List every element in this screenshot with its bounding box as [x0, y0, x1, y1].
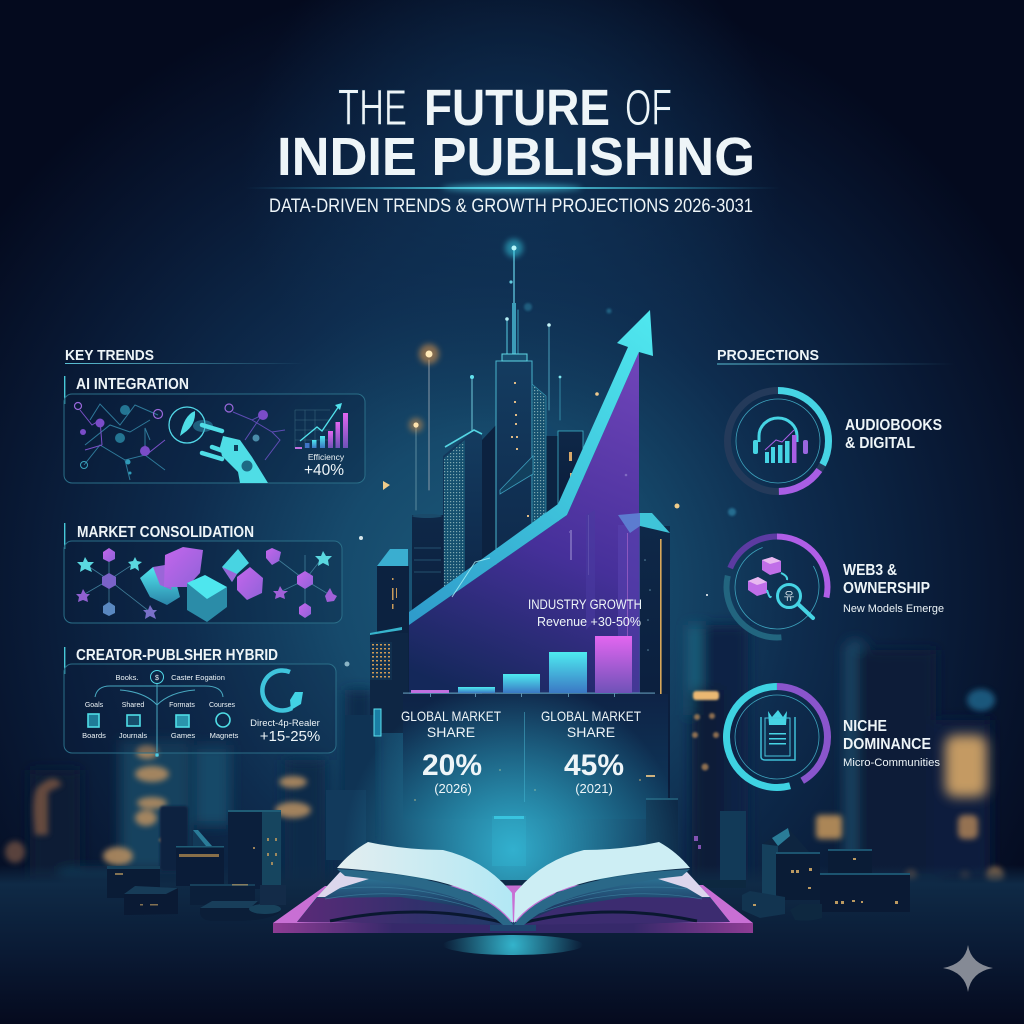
bar chart: industry growth [403, 597, 655, 697]
heading: AI INTEGRATION [76, 376, 189, 393]
panel: market consolidation [64, 523, 342, 623]
quill circle [169, 407, 213, 443]
efficiency label: Efficiency [308, 452, 345, 462]
panel: creator-publisher hybrid: Caster Eogation [171, 673, 225, 682]
right tower small [558, 431, 583, 521]
panel: creator-publisher hybrid: Courses [209, 702, 236, 709]
panel: creator-publisher hybrid: Goals [85, 702, 104, 709]
stat: market share 2026: GLOBAL MARKET [401, 708, 501, 724]
stat: market share 2021: 45% [564, 749, 624, 782]
label: AUDIOBOOKS [845, 417, 942, 434]
stat: market share 2021: (2021) [575, 781, 613, 796]
large cubes [140, 547, 263, 622]
left top page [337, 842, 513, 925]
direct to reader label: Direct-4p-Realer [250, 718, 320, 729]
growth arrow [409, 310, 653, 625]
panel: creator-publisher hybrid: Books. [116, 673, 138, 682]
stat: market share 2026: (2026) [434, 781, 472, 796]
projection: audiobooks [708, 371, 942, 511]
panel: creator-publisher hybrid: Journals [119, 731, 147, 740]
stat: market share 2026: 20% [422, 749, 482, 782]
small foreground buildings left [107, 806, 286, 921]
street lamps and spires [416, 250, 560, 510]
title line 1: THE [338, 79, 407, 136]
panel: creator-publisher hybrid [64, 647, 336, 756]
title: OF [625, 79, 672, 136]
chart label: INDUSTRY GROWTH [528, 597, 642, 612]
purple area under growth arrow [409, 352, 639, 693]
hybrid icons [88, 713, 230, 727]
open book [273, 842, 753, 955]
ring chart [711, 521, 843, 653]
bokeh lights [5, 504, 1004, 885]
label: WEB3 & [843, 562, 897, 579]
ring chart [708, 371, 848, 511]
bar chart: industry growth: Revenue +30-50% [537, 615, 641, 629]
mini bar chart [295, 403, 348, 449]
back tower block [482, 425, 496, 700]
connector lines [83, 553, 330, 612]
icon: sparkle watermark [943, 945, 993, 992]
blurred distant city [30, 625, 990, 905]
low left towers [412, 515, 443, 685]
lower tower block behind stats [326, 694, 678, 873]
panel: AI integration [64, 376, 365, 483]
section heading: key trends: KEY TRENDS [65, 347, 154, 364]
central glowing skyline [345, 239, 670, 840]
cubes and magnifier icon [748, 557, 813, 618]
left page block [297, 872, 513, 925]
small stars [76, 551, 337, 619]
small foreground buildings right [694, 811, 910, 921]
label: NICHE [843, 718, 887, 735]
title [245, 79, 780, 217]
stat: market share 2021 [541, 708, 641, 796]
projection: web3: OWNERSHIP [843, 580, 930, 597]
cubes and magnifier icon: 유 [784, 591, 795, 603]
front right tower [618, 513, 670, 808]
cover [273, 885, 753, 923]
main tower [496, 361, 532, 681]
projection: audiobooks: & DIGITAL [845, 435, 915, 452]
projection: niche dominance: Micro-Communities [843, 757, 940, 769]
heading: MARKET CONSOLIDATION [77, 524, 254, 541]
panel: creator-publisher hybrid: Games [171, 731, 195, 740]
panel: creator-publisher hybrid: Formats [169, 702, 195, 709]
loop arrow [262, 670, 303, 710]
panel: creator-publisher hybrid: +15-25% [260, 728, 320, 745]
title: FUTURE [424, 79, 610, 136]
ring chart [715, 675, 839, 799]
panel: AI integration: +40% [304, 462, 344, 479]
floor [0, 865, 1024, 1024]
subtitle: DATA-DRIVEN TRENDS & GROWTH PROJECTIONS 2026-3031 [269, 195, 753, 217]
right top page [514, 842, 690, 925]
projection: web3: New Models Emerge [843, 603, 944, 615]
projection: niche dominance: DOMINANCE [843, 736, 931, 753]
stat: market share 2021: GLOBAL MARKET [541, 708, 641, 724]
tree diagram [95, 670, 223, 756]
section heading: projections: PROJECTIONS [717, 347, 819, 364]
headphones chart icon [753, 418, 808, 463]
right page block [514, 872, 730, 925]
panel: creator-publisher hybrid: Shared [122, 702, 144, 709]
stat: market share 2026 [401, 708, 501, 796]
robot hand [202, 425, 268, 483]
stat: market share 2021: SHARE [567, 724, 615, 740]
panel: creator-publisher hybrid: $ [155, 675, 159, 682]
stat: market share 2026: SHARE [427, 724, 475, 740]
small hexagons [102, 548, 313, 618]
crown and document icon [761, 710, 795, 760]
panel: creator-publisher hybrid: Magnets [210, 731, 239, 740]
heading: CREATOR-PUBLSHER HYBRID [76, 647, 278, 664]
projection: niche dominance [715, 675, 940, 799]
panel: creator-publisher hybrid: Boards [82, 731, 106, 740]
book glow [340, 690, 690, 880]
projection: web3 [711, 521, 944, 653]
left glass tower [443, 430, 482, 640]
title line 2: INDIE PUBLISHING [277, 127, 755, 187]
network illustration [74, 402, 285, 480]
